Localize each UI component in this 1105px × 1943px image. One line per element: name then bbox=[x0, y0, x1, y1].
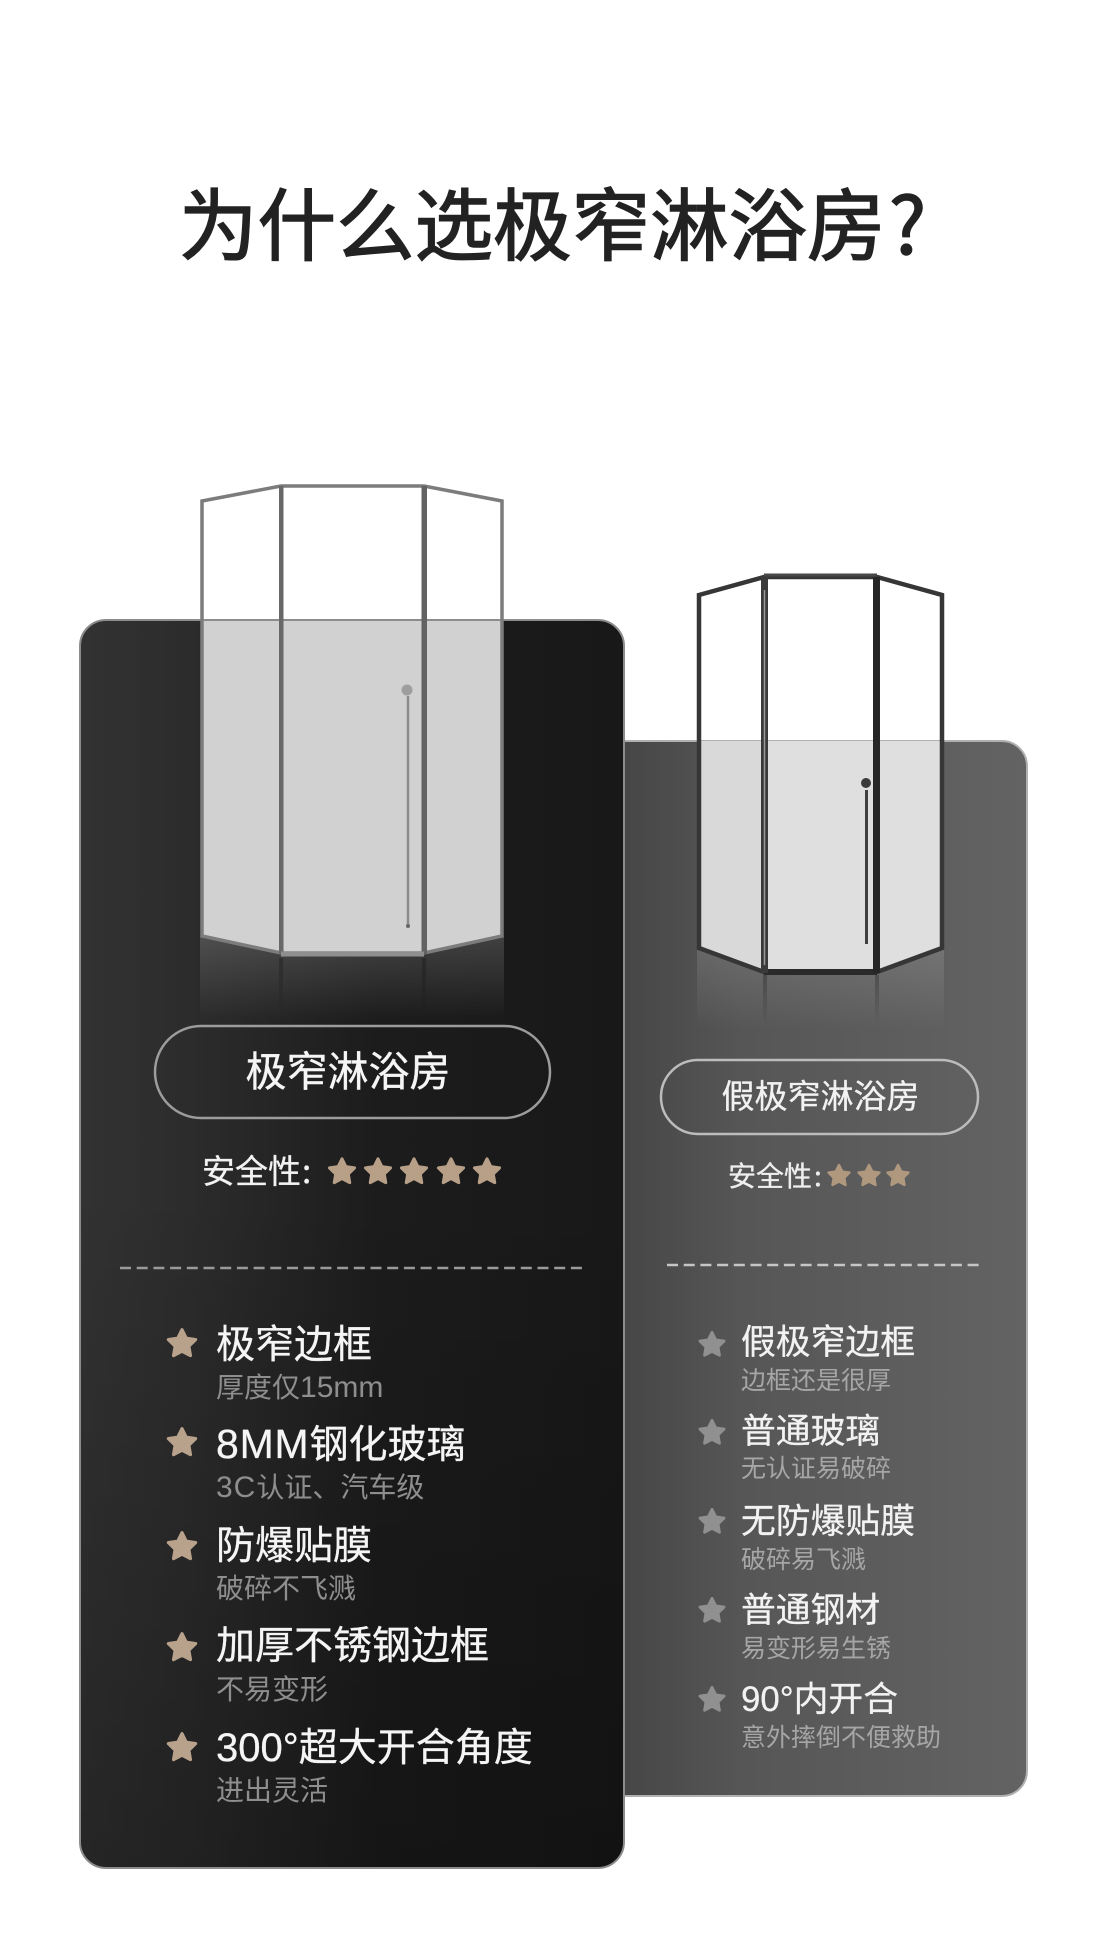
label pill: 极窄淋浴房 bbox=[155, 1026, 550, 1118]
item: 极窄边框: 厚度仅15mm bbox=[216, 1371, 383, 1404]
item: 加厚不锈钢边框 bbox=[168, 1625, 489, 1705]
item: 假极窄边框: 假极窄边框 bbox=[741, 1323, 915, 1362]
item: 无防爆贴膜: 无防爆贴膜 bbox=[741, 1502, 915, 1541]
item: 极窄边框: 极窄边框 bbox=[216, 1324, 372, 1367]
title: ? bbox=[889, 163, 926, 277]
item: 300°超大开合角度 bbox=[168, 1726, 533, 1806]
label pill: 极窄淋浴房: 极窄淋浴房 bbox=[246, 1049, 450, 1095]
panel: ultra narrow shower room bbox=[80, 486, 624, 1868]
item: 300°超大开合角度: 300°超大开合角度 bbox=[216, 1726, 533, 1770]
item: 防爆贴膜: 防爆贴膜 bbox=[216, 1525, 372, 1568]
item: 防爆贴膜 bbox=[168, 1525, 372, 1604]
item: 极窄边框 bbox=[168, 1324, 383, 1404]
illustration: ultra narrow shower enclosure bbox=[200, 486, 504, 1020]
title: 为什么选极窄淋浴房 bbox=[179, 183, 886, 271]
label pill: 假极窄淋浴房 bbox=[661, 1060, 978, 1134]
item: 防爆贴膜: 破碎不飞溅 bbox=[216, 1573, 356, 1604]
item: 300°超大开合角度: 进出灵活 bbox=[216, 1775, 328, 1806]
item: 普通玻璃: 普通玻璃 bbox=[741, 1412, 880, 1451]
item: 无防爆贴膜 bbox=[700, 1502, 915, 1574]
item: 普通玻璃 bbox=[700, 1412, 891, 1483]
safety rating: 3 stars: 安全性: bbox=[728, 1155, 822, 1195]
item: 90°内开合 bbox=[700, 1680, 941, 1752]
label pill: 假极窄淋浴房: 假极窄淋浴房 bbox=[722, 1078, 920, 1115]
item: 8MM钢化玻璃 bbox=[168, 1421, 466, 1504]
item: 无防爆贴膜: 破碎易飞溅 bbox=[741, 1546, 866, 1574]
safety rating: 3 stars bbox=[728, 1155, 908, 1195]
item: 加厚不锈钢边框: 加厚不锈钢边框 bbox=[216, 1625, 489, 1668]
item: 90°内开合: 意外摔倒不便救助 bbox=[741, 1724, 941, 1752]
item: 8MM钢化玻璃: 8MM钢化玻璃 bbox=[216, 1421, 466, 1467]
item: 假极窄边框 bbox=[700, 1323, 915, 1395]
item: 普通钢材: 普通钢材 bbox=[741, 1591, 880, 1630]
item: 8MM钢化玻璃: 3C认证、汽车级 bbox=[216, 1471, 424, 1504]
safety rating: 5 stars: 安全性: bbox=[202, 1145, 311, 1193]
item: 普通钢材 bbox=[700, 1591, 891, 1663]
safety rating: 5 stars bbox=[202, 1145, 500, 1193]
item: 普通玻璃: 无认证易破碎 bbox=[741, 1455, 891, 1483]
illustration: fake narrow shower enclosure bbox=[697, 575, 944, 1030]
feature list: fake narrow shower room bbox=[700, 1323, 941, 1752]
item: 假极窄边框: 边框还是很厚 bbox=[741, 1367, 891, 1395]
item: 90°内开合: 90°内开合 bbox=[741, 1680, 898, 1719]
item: 普通钢材: 易变形易生锈 bbox=[741, 1635, 891, 1663]
panel: fake narrow shower room bbox=[620, 575, 1027, 1796]
item: 加厚不锈钢边框: 不易变形 bbox=[216, 1674, 328, 1705]
feature list: ultra narrow shower room bbox=[168, 1324, 533, 1806]
